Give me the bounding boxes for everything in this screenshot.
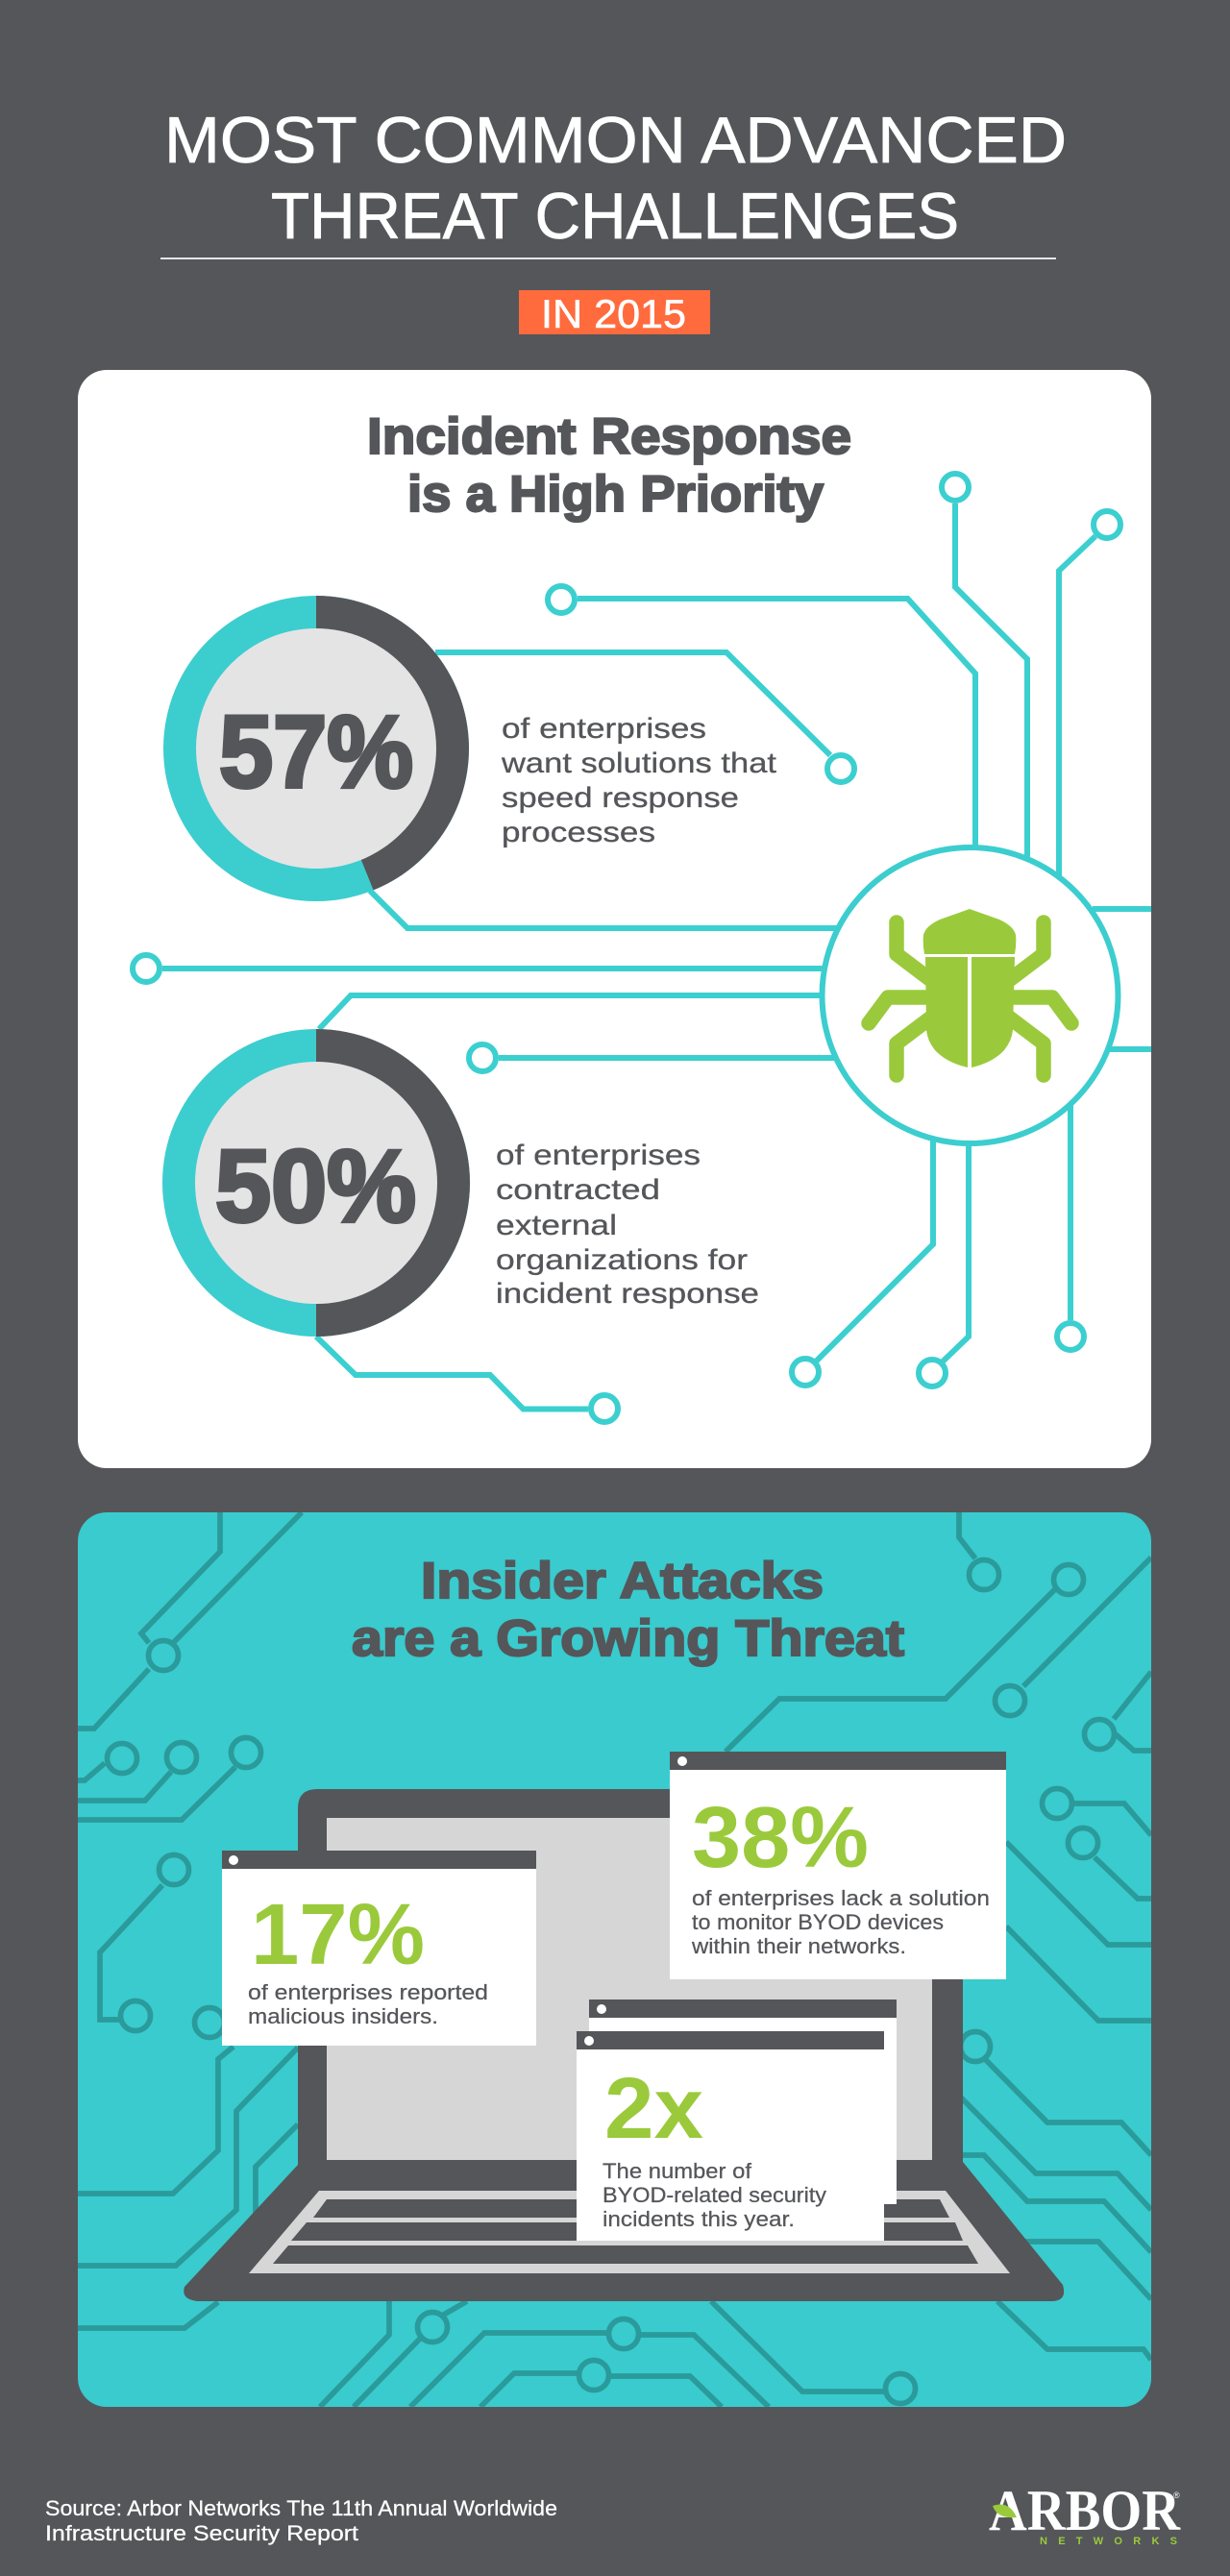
window: back bbox=[589, 1999, 897, 2204]
text: 50% description bbox=[496, 1140, 759, 1310]
text: 50% description: contracted bbox=[496, 1174, 660, 1206]
icon: bug in circle bbox=[823, 847, 1119, 1143]
source note: Infrastructure Security Report bbox=[45, 2521, 358, 2545]
card: 2x: BYOD-related security bbox=[603, 2183, 826, 2207]
logo: arbor networks: ARBOR bbox=[989, 2479, 1181, 2542]
heading: insider attacks: are a Growing Threat bbox=[352, 1610, 904, 1667]
donut chart: 50%: 50% bbox=[215, 1128, 416, 1243]
card: 2x: 2x bbox=[604, 2061, 703, 2157]
donut chart: 57%: 57% bbox=[219, 694, 413, 809]
heading: insider attacks bbox=[352, 1553, 904, 1667]
donut chart: 57% bbox=[163, 596, 469, 901]
text: 50% description: organizations for bbox=[496, 1244, 748, 1276]
badge: in 2015: IN 2015 bbox=[541, 291, 686, 336]
card: 38%: of enterprises lack a solution bbox=[692, 1886, 990, 1910]
title: THREAT CHALLENGES bbox=[271, 180, 959, 253]
card: 38%: within their networks. bbox=[691, 1934, 906, 1958]
logo: arbor networks: NETWORKS bbox=[1040, 2536, 1177, 2547]
title: MOST COMMON ADVANCED bbox=[164, 104, 1067, 177]
card: 2x: The number of bbox=[603, 2159, 752, 2183]
circuit lines around bug bbox=[133, 474, 1151, 1422]
card: 17%: 17% bbox=[251, 1887, 425, 1983]
text: 50% description: of enterprises bbox=[496, 1140, 701, 1171]
logo: arbor networks: ® bbox=[1173, 2490, 1180, 2500]
text: 50% description: incident response bbox=[496, 1278, 759, 1310]
heading: incident response bbox=[367, 408, 851, 523]
card: 17%: malicious insiders. bbox=[248, 2004, 438, 2028]
card: 38%: to monitor BYOD devices bbox=[692, 1910, 944, 1934]
text: 50% description: external bbox=[496, 1210, 617, 1241]
heading: incident response: Incident Response bbox=[367, 408, 851, 465]
donut chart: 50% bbox=[162, 1029, 470, 1337]
panel: incident response bbox=[78, 370, 1151, 1468]
icon: laptop bbox=[184, 1789, 1064, 2301]
card: 2x bbox=[577, 2031, 884, 2241]
text: 57% description: speed response bbox=[502, 782, 739, 814]
panel: insider attacks bbox=[78, 1512, 1151, 2407]
card: 17% bbox=[222, 1851, 536, 2046]
card: 2x: incidents this year. bbox=[603, 2207, 795, 2231]
card: 17%: of enterprises reported bbox=[248, 1980, 488, 2004]
card: 38%: 38% bbox=[692, 1790, 869, 1886]
source note: Source: Arbor Networks The 11th Annual Worldwide bbox=[45, 2496, 557, 2520]
circuit pattern bbox=[78, 1512, 1151, 2407]
text: 57% description: of enterprises bbox=[502, 713, 706, 745]
source note bbox=[45, 2496, 557, 2545]
heading: insider attacks: Insider Attacks bbox=[421, 1553, 824, 1609]
card: 38% bbox=[670, 1752, 1006, 1979]
heading: incident response: is a High Priority bbox=[407, 466, 824, 523]
text: 57% description: want solutions that bbox=[501, 748, 777, 779]
text: 57% description: processes bbox=[502, 817, 655, 848]
title bbox=[164, 104, 1067, 253]
text: 57% description bbox=[501, 713, 777, 848]
